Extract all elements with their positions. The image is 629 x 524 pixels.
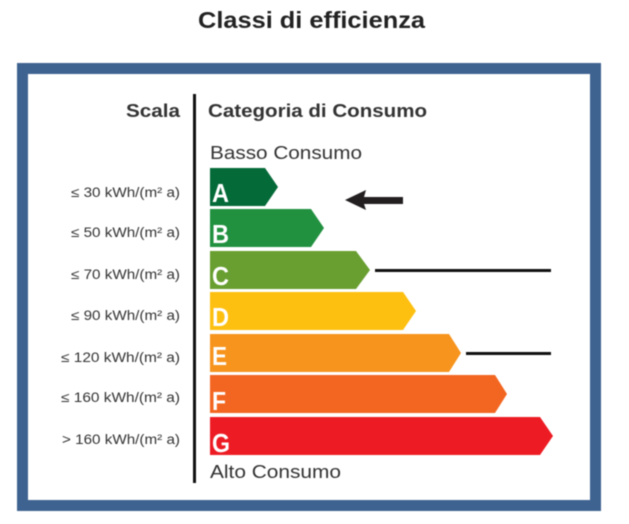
bar D [210, 292, 416, 332]
bar E: E [212, 341, 227, 371]
bar F [210, 375, 507, 416]
scale: C: ≤ 70 kWh/(m² a) [71, 267, 180, 282]
panel: blue frame [22, 68, 596, 506]
scale: E: ≤ 120 kWh/(m² a) [61, 350, 180, 365]
heading: Categoria di Consumo: Categoria di Consumo [208, 101, 427, 121]
bar B: B [212, 219, 229, 249]
bar B [210, 209, 324, 249]
scale: A: ≤ 30 kWh/(m² a) [71, 185, 180, 200]
bar E [210, 334, 461, 372]
bar F: F [212, 386, 226, 416]
bar G [210, 417, 553, 458]
arrow [345, 190, 403, 210]
line from E [466, 352, 551, 355]
divider line [193, 94, 196, 483]
scale labels [61, 185, 180, 447]
heading: Scala: Scala [126, 101, 181, 121]
bar C [210, 251, 370, 291]
label: Basso Consumo: Basso Consumo [210, 143, 362, 163]
bar D: D [212, 302, 229, 332]
scale: F: ≤ 160 kWh/(m² a) [61, 390, 180, 405]
bar G: G [212, 428, 230, 458]
scale: B: ≤ 50 kWh/(m² a) [71, 225, 180, 240]
scale: D: ≤ 90 kWh/(m² a) [71, 308, 180, 323]
bar A: A [212, 178, 229, 208]
line from C [375, 269, 551, 272]
title: Classi di efficienza [198, 7, 426, 33]
energy class bars [210, 168, 553, 458]
label: Alto Consumo: Alto Consumo [210, 462, 341, 482]
bar C: C [212, 261, 229, 291]
bar A [210, 168, 278, 208]
scale: G: > 160 kWh/(m² a) [62, 432, 180, 447]
